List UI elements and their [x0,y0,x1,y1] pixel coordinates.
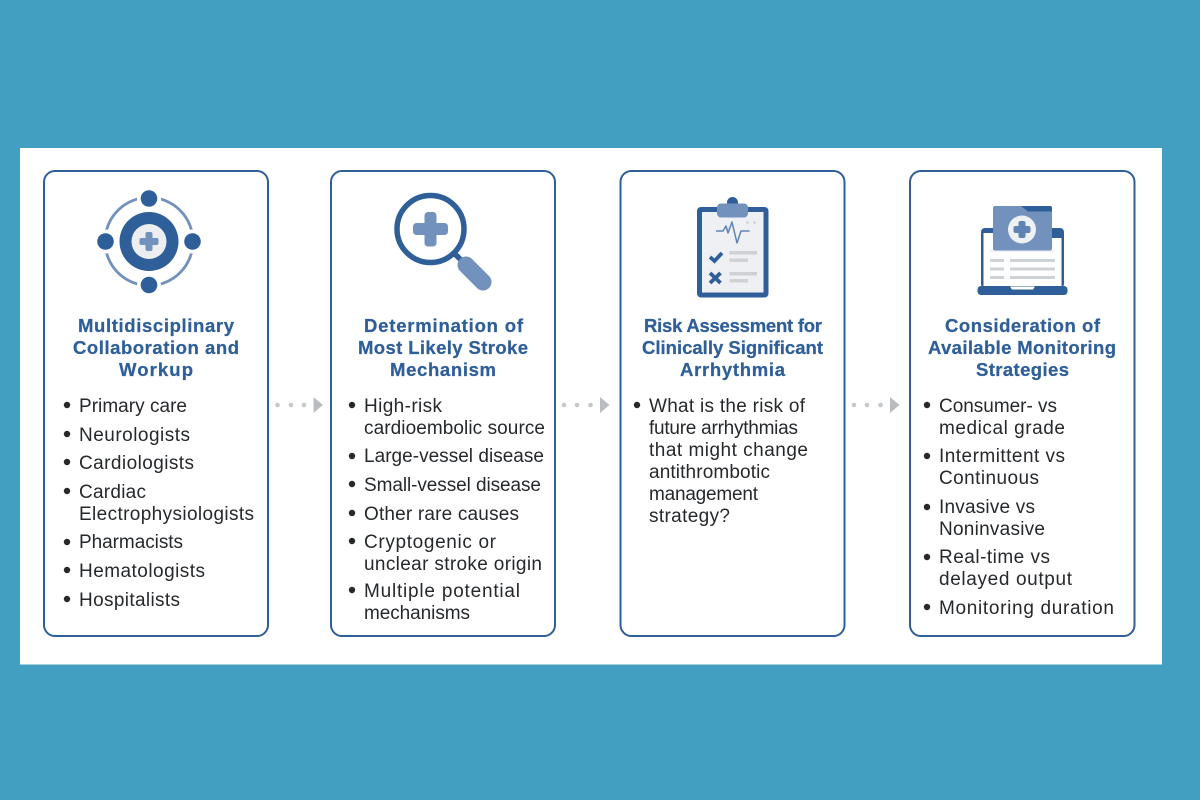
list: strategies: Invasive vs [939,497,1035,518]
panel: monitoring strategies [910,171,1134,636]
panel: risk assessment [620,171,844,636]
heading: monitoring strategies: Available Monitoring [928,337,1116,358]
white background panel [20,148,1162,664]
heading: multidisciplinary: Workup [119,359,193,380]
text: risk question: management [649,484,759,505]
panel: stroke mechanism [331,171,555,636]
text: risk question: that might change [649,440,808,461]
panel: multidisciplinary collaboration [44,171,268,636]
heading: risk assessment [642,315,823,380]
arrow 2 [562,397,610,413]
list: specialists: Cardiac [79,482,146,503]
list: strategies: Real-time vs [939,547,1050,568]
heading: risk assessment: Clinically Significant [642,337,823,358]
arrow 1 [275,397,323,413]
list: strategies: Monitoring duration [939,598,1114,619]
list: specialists: Cardiologists [79,453,194,474]
heading: monitoring strategies [928,315,1116,380]
list: strategies: Continuous [939,468,1039,489]
heading: stroke mechanism [358,315,528,380]
list: specialists: Hospitalists [79,590,180,611]
list: strategies [924,396,1114,619]
heading: risk assessment: Risk Assessment for [644,315,822,336]
list: mechanisms: Large-vessel disease [364,446,544,467]
heading: monitoring strategies: Strategies [976,359,1069,380]
list: specialists: Hematologists [79,561,205,582]
icon: clipboard [697,197,768,298]
list: strategies: delayed output [939,569,1073,590]
list: specialists: Pharmacists [79,532,183,553]
list: specialists: Primary care [79,396,187,417]
list: strategies: Consumer- vs [939,396,1057,417]
icon: laptop with medical folder [978,206,1068,295]
list: mechanisms: cardioembolic source [364,418,545,439]
text: risk question [634,396,808,527]
list: mechanisms: Other rare causes [364,504,519,525]
text: risk question: What is the risk of [649,396,806,417]
text: risk question: strategy? [649,506,730,527]
icon: care team ring [94,186,204,297]
heading: stroke mechanism: Determination of [364,315,524,336]
heading: stroke mechanism: Most Likely Stroke [358,337,528,358]
list: mechanisms: Multiple potential [364,581,520,602]
list: mechanisms [349,396,545,624]
text: risk question: antithrombotic [649,462,770,483]
list: specialists: Neurologists [79,425,190,446]
list: specialists [64,396,254,611]
heading: multidisciplinary [73,315,239,380]
heading: multidisciplinary: Collaboration and [73,337,239,358]
list: mechanisms: mechanisms [364,603,470,624]
heading: risk assessment: Arrhythmia [680,359,786,380]
icon: magnifying glass with cross [397,196,483,282]
list: strategies: medical grade [939,418,1065,439]
list: mechanisms: Small-vessel disease [364,475,541,496]
heading: stroke mechanism: Mechanism [390,359,496,380]
heading: multidisciplinary: Multidisciplinary [78,315,235,336]
list: strategies: Intermittent vs [939,446,1065,467]
list: specialists: Electrophysiologists [79,504,254,525]
list: mechanisms: High-risk [364,396,442,417]
list: mechanisms: Cryptogenic or [364,532,497,553]
text: risk question: future arrhythmias [649,418,798,439]
arrow 3 [852,397,900,413]
list: mechanisms: unclear stroke origin [364,554,542,575]
heading: monitoring strategies: Consideration of [945,315,1101,336]
list: strategies: Noninvasive [939,519,1045,540]
